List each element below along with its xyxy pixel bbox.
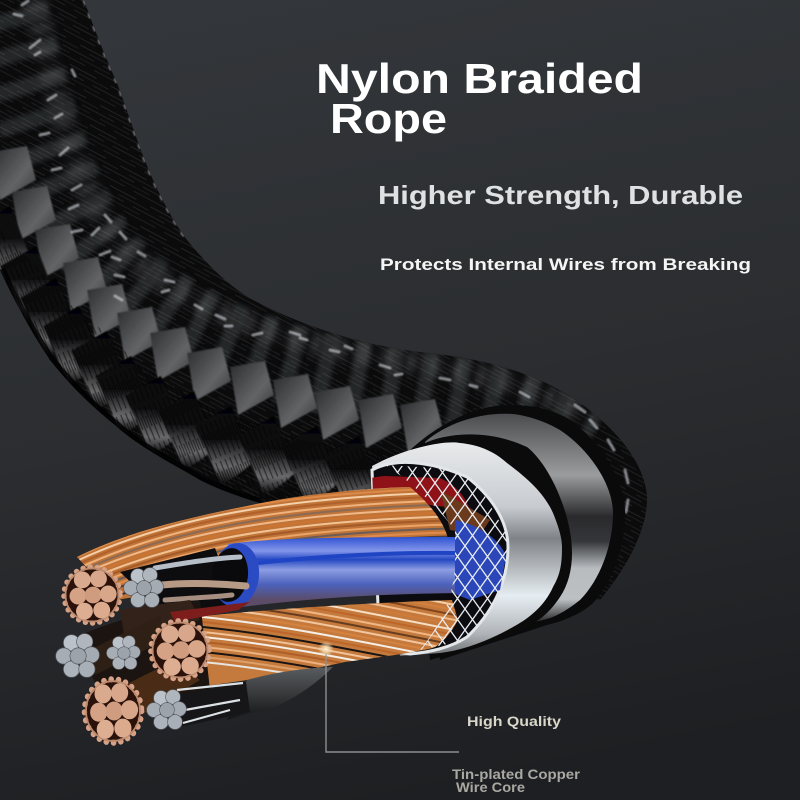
streak fibre lines <box>0 240 400 502</box>
blue insulated core <box>120 520 506 615</box>
rear steel sleeve <box>425 414 613 640</box>
copper core bottom <box>84 679 142 743</box>
silver core left <box>56 634 99 677</box>
blue tube ring <box>210 541 262 609</box>
lower copper bundle <box>202 600 458 686</box>
metal connector rings <box>370 405 625 660</box>
lower braid streaks <box>0 206 381 514</box>
upper sheen band <box>35 0 590 420</box>
grey braid chevrons <box>0 146 444 453</box>
inner silver strands <box>155 557 246 600</box>
title <box>316 55 643 142</box>
callout leader line <box>318 641 459 752</box>
copper core top <box>64 567 120 623</box>
dark wires behind cross sections <box>70 600 250 725</box>
opening interior <box>372 462 508 654</box>
label: tin-plated copper wire core: Tin-plated Copper <box>452 767 581 782</box>
lower black insulated wire <box>172 667 333 728</box>
orange glimpses behind mesh <box>440 491 490 531</box>
shielding mesh <box>385 465 510 650</box>
lower edge shadow <box>0 270 260 503</box>
title: Rope <box>330 95 447 142</box>
copper core middle <box>151 621 209 679</box>
rear black ring <box>405 405 625 660</box>
upper copper bundle <box>77 487 448 600</box>
title: Nylon Braided <box>316 55 643 102</box>
broad diagonal braid bands <box>0 0 590 440</box>
silver core top <box>124 568 163 607</box>
front black ring <box>410 434 572 660</box>
subtitle: Higher Strength, Durable <box>378 180 743 210</box>
description: Protects Internal Wires from Breaking <box>380 255 751 274</box>
label: high quality: High Quality <box>467 714 562 729</box>
sparkling highlights <box>14 1 628 537</box>
strand beading on upper edge <box>84 0 187 240</box>
silver core bottom <box>147 690 186 729</box>
label: tin-plated copper wire core: Wire Core <box>456 780 526 795</box>
hairline fibre texture <box>0 0 647 600</box>
blue tube interior <box>209 546 251 604</box>
braided cable jacket <box>0 0 647 600</box>
small silver core <box>107 636 140 669</box>
front silver ferrule <box>372 442 562 656</box>
wire cross sections <box>56 567 209 743</box>
dark recess around wires <box>120 548 236 615</box>
label: tin-plated copper wire core <box>452 767 581 795</box>
red wire remnant <box>372 476 469 508</box>
